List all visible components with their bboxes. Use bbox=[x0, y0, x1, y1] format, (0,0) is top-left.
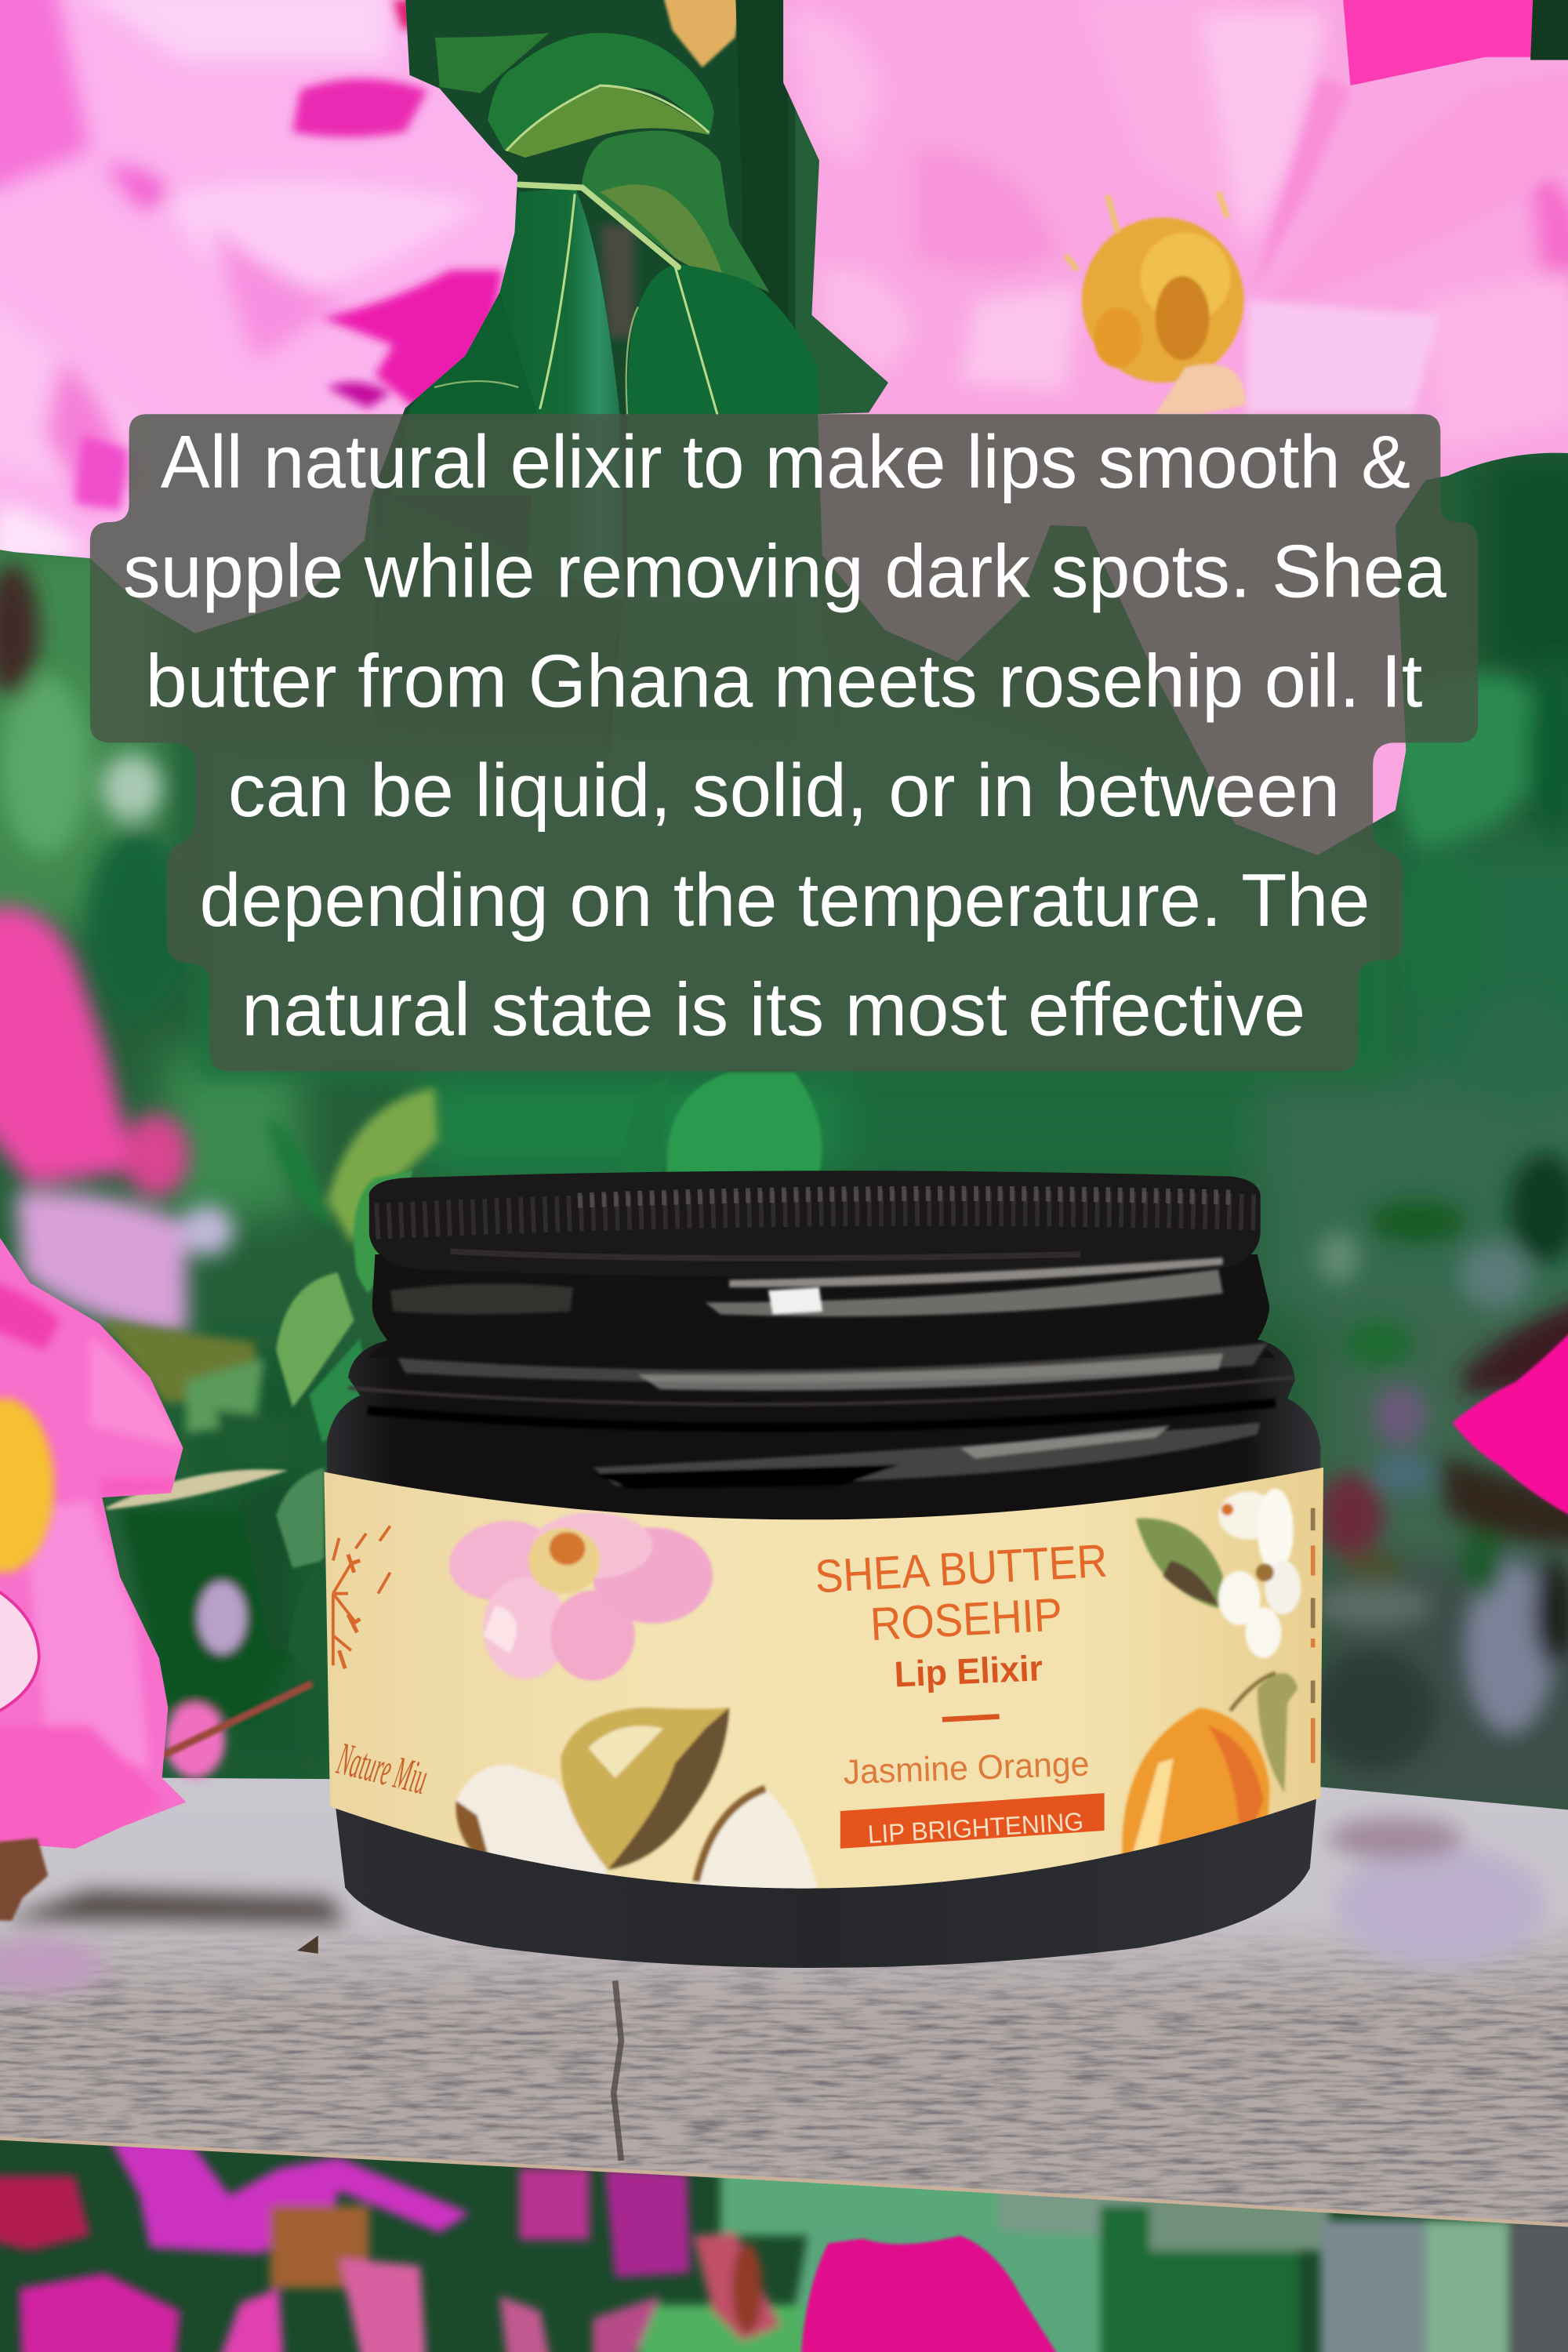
text panel copy bbox=[123, 420, 1447, 1052]
flower: top left bbox=[0, 0, 517, 633]
text panel copy: butter from Ghana meets rosehip oil. It bbox=[146, 639, 1422, 723]
lower left flower: yellow stamens bbox=[0, 1399, 54, 1573]
text panel copy: natural state is its most effective bbox=[241, 968, 1305, 1052]
label: scent: Jasmine Orange bbox=[843, 1744, 1090, 1791]
jar label bbox=[324, 1468, 1323, 1893]
jar lid bbox=[369, 1171, 1261, 1277]
lower left flower: pale inner petal bbox=[0, 1583, 39, 1718]
label: rosehip flower bbox=[443, 1512, 713, 1681]
leaves: top centre bbox=[195, 0, 1396, 1080]
bottom strip: magenta petal bbox=[800, 2236, 1077, 2352]
jar shoulder and glass body bbox=[327, 1340, 1320, 1650]
label: leaf and jasmine flower bbox=[1136, 1489, 1301, 1658]
text panel copy: can be liquid, solid, or in between bbox=[228, 749, 1340, 833]
top right: magenta back petal bbox=[1335, 0, 1545, 93]
leaves: centre behind the jar bbox=[622, 1073, 822, 1179]
background: blurred pink flowers left side bbox=[0, 907, 234, 1335]
text panel copy: All natural elixir to make lips smooth & bbox=[161, 420, 1410, 504]
label: product name: SHEA BUTTER bbox=[814, 1534, 1109, 1602]
jar neck bbox=[368, 1254, 1276, 1358]
label: shea nuts bbox=[456, 1708, 818, 1893]
wooden shelf bbox=[0, 1777, 1568, 2227]
jar label: ROSEHIP bbox=[869, 1588, 1064, 1650]
label: dash bbox=[942, 1716, 1000, 1719]
label: side panel small print bbox=[1312, 1508, 1314, 1763]
flower: right edge bbox=[1453, 1305, 1568, 1530]
jar label: Nature Miu bbox=[332, 1732, 433, 1804]
flower: top right bbox=[765, 0, 1568, 900]
label: lip brightening badge bbox=[840, 1793, 1105, 1849]
bottom strip: blurred flowers below shelf bbox=[0, 2116, 1568, 2352]
text panel copy: supple while removing dark spots. Shea bbox=[123, 530, 1447, 614]
label: product type: Lip Elixir bbox=[894, 1647, 1044, 1694]
text panel background bbox=[90, 414, 1478, 1072]
jar base bbox=[333, 1786, 1317, 1968]
jar bbox=[324, 1171, 1323, 1968]
top right: golden stamens bbox=[1065, 192, 1246, 414]
flower: lower left bbox=[0, 1238, 187, 1922]
jar glass highlights bbox=[348, 1258, 1294, 1489]
leaves and stems: lower left, beside the jar bbox=[102, 1073, 822, 1778]
text panel copy: depending on the temperature. The bbox=[200, 858, 1370, 942]
label: dandelion motif bbox=[333, 1526, 390, 1668]
label: lip brightening badge: LIP BRIGHTENING bbox=[867, 1807, 1084, 1849]
label: orange and bud bbox=[1122, 1673, 1298, 1860]
